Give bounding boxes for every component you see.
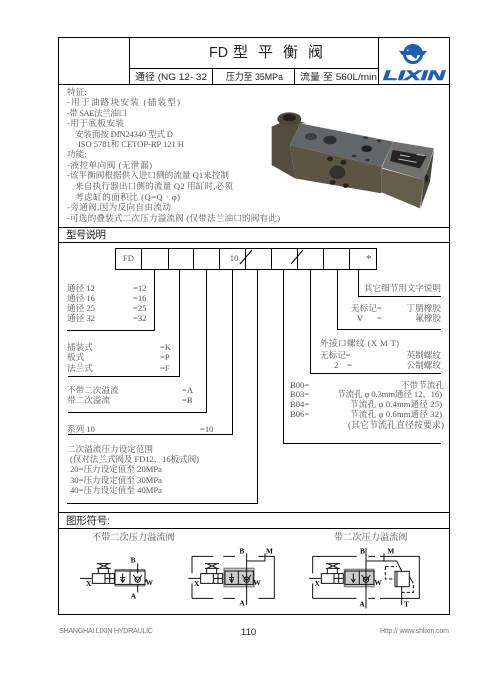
footer: page number: 110	[241, 627, 256, 638]
secondary pressure range	[67, 443, 199, 495]
heading: model code: 型号说明	[66, 228, 106, 241]
port thread options: 2	[334, 360, 338, 370]
port thread options: 公制螺纹	[407, 359, 441, 370]
symbol: valve with manifold, port M: B	[239, 546, 244, 555]
features text block: 特征:	[67, 86, 87, 97]
orifice options: B03=	[290, 389, 309, 399]
symbol: valve with secondary relief, ports M and T: W	[374, 578, 382, 587]
seal options: =	[377, 313, 382, 323]
mounting options: 插装式	[67, 341, 93, 352]
features text block: 安装面按 DIN24340 型式 D	[75, 128, 173, 139]
mounting options: =K	[160, 342, 172, 352]
bore size options: =12	[133, 283, 146, 293]
symbol: valve with secondary relief, ports M and T	[309, 546, 419, 608]
bore size options: 通径 16	[67, 292, 96, 303]
features text block: 功能:	[67, 148, 87, 159]
bore size options: 通径 25	[67, 302, 95, 313]
footer: url: Http:// www.shlixin.com	[380, 628, 449, 635]
secondary pressure range: 40=压力设定值至 40MPa	[70, 484, 162, 495]
secondary pressure range: 二次溢流压力设定范围	[67, 443, 153, 454]
secondary pressure range: 30=压力设定值至 30MPa	[70, 474, 162, 485]
icon: LIXIN logo: LIXIN	[383, 68, 445, 83]
symbol: valve with manifold, port M	[188, 546, 274, 608]
secondary relief options: 不带二次溢流	[67, 384, 119, 395]
bore size options: 通径 12	[67, 282, 95, 293]
spec: flow: 流量 至 560L/min	[300, 71, 377, 83]
seal options: V	[357, 313, 364, 323]
title	[209, 44, 323, 61]
features text block: ISO 5781和 CETOP-RP 121 H	[78, 139, 184, 149]
bore size options: 通径 32	[67, 312, 95, 323]
mounting options	[67, 341, 172, 373]
symbol: valve without relief: X	[86, 579, 92, 588]
footer: company: SHANGHAI LIXIN HYDRAULIC	[59, 626, 153, 635]
spec: bore size: 通径 (NG 12- 32	[135, 71, 207, 83]
symbol: valve without relief: A	[131, 591, 137, 600]
mounting options: 法兰式	[67, 362, 93, 373]
secondary relief options: =A	[182, 385, 194, 395]
bore size options: =16	[133, 293, 147, 303]
orifice options: 节流孔 φ 0.4mm通径 25)	[350, 398, 442, 409]
symbol: valve with manifold, port M: X	[194, 579, 200, 588]
orifice options: B04=	[290, 399, 309, 409]
leader lines	[67, 270, 441, 504]
features text block: -该平衡阀根据供入进口侧的流量 Q1来控制	[67, 169, 229, 180]
symbol: valve with secondary relief, ports M and T: T	[404, 599, 409, 608]
symbol: valve with secondary relief, ports M and T: A	[359, 599, 365, 608]
heading: symbols: 图形符号:	[66, 514, 110, 527]
symbol: valve with secondary relief, ports M and T: B	[360, 546, 365, 555]
port thread options: 外接口螺纹 (X M T)	[320, 337, 399, 348]
features text block: 来自执行器出口侧的流量 Q2 用缸时,必须	[75, 180, 233, 191]
product photo: valve block	[272, 112, 434, 208]
seal options: 无标记=	[351, 302, 382, 313]
symbol: valve with manifold, port M: A	[239, 599, 245, 608]
title: 衡	[283, 44, 298, 61]
orifice options: B00=	[290, 380, 309, 390]
model code boxes: FD	[123, 253, 134, 263]
icon: LIXIN logo	[383, 45, 445, 83]
mounting options: =P	[160, 352, 170, 362]
secondary relief options: 带二次溢流	[67, 394, 110, 405]
features text block	[67, 86, 280, 223]
spec: pressure: 压力至 35MPa	[226, 71, 284, 83]
secondary relief options	[67, 384, 194, 405]
model code boxes: 10	[230, 253, 238, 263]
bore size options: =25	[133, 303, 146, 313]
seal options: 丁腈橡胶	[407, 302, 441, 313]
orifice options: 节流孔 φ 0.3mm通径 12、16)	[337, 388, 442, 399]
features text block: -可选的叠装式二次压力溢流阀 (仅带法兰油口的阀有此)	[67, 212, 280, 223]
page frame	[58, 38, 450, 614]
caption: with relief: 带二次压力溢流阀	[334, 531, 408, 542]
orifice options: 节流孔 φ 0.6mm通径 32)	[350, 408, 442, 419]
title: 型	[233, 44, 248, 61]
symbol: valve without relief: W	[146, 578, 154, 587]
model code boxes: *	[366, 253, 372, 265]
features text block: -用于底板安装	[67, 117, 124, 128]
series: =10	[200, 424, 213, 434]
secondary pressure range: 20=压力设定值至 20MPa	[70, 463, 162, 474]
features text block: -用于油路块安装 (插装型)	[67, 96, 180, 107]
port thread options: =	[347, 360, 352, 370]
mounting options: 板式	[67, 351, 85, 362]
title: 平	[258, 44, 273, 61]
port thread options: 无标记=	[320, 349, 351, 360]
symbol: valve with manifold, port M: M	[266, 546, 273, 555]
title: 阀	[308, 44, 323, 61]
other details note: 其它细节用文字说明	[364, 282, 441, 293]
symbol: valve without relief	[80, 555, 154, 600]
mounting options: =F	[160, 363, 170, 373]
features text block: 考虑缸的面积比 (Q=Q · φ)	[75, 191, 180, 202]
caption: without relief: 不带二次压力溢流阀	[92, 531, 175, 542]
seal options	[351, 302, 441, 323]
features text block: -带 SAE法兰油口	[67, 107, 127, 118]
orifice options: B06=	[290, 409, 309, 419]
seal options: 氟橡胶	[415, 312, 441, 323]
series: 系列 10	[67, 423, 95, 434]
secondary pressure range: (仅对法兰式阀及 FD12、16板式阀)	[70, 453, 199, 464]
orifice options	[290, 379, 444, 430]
symbol: valve with secondary relief, ports M and T: X	[315, 579, 321, 588]
orifice options: (其它节流孔直径按要求)	[348, 419, 444, 430]
features text block: -液控单向阀 (无泄漏)	[67, 159, 152, 170]
features text block: -旁通阀,因为反向自由流动	[67, 201, 171, 212]
symbol: valve with secondary relief, ports M and T: M	[387, 546, 394, 555]
orifice options: 不带节流孔	[401, 379, 444, 390]
symbol: valve without relief: B	[131, 555, 136, 564]
bore size options	[67, 282, 147, 323]
bore size options: =32	[133, 313, 146, 323]
series	[67, 423, 213, 434]
model code boxes	[116, 248, 376, 270]
port thread options	[320, 337, 441, 370]
symbol: valve with manifold, port M: W	[253, 578, 261, 587]
title: FD	[209, 44, 228, 61]
secondary relief options: =B	[182, 395, 193, 405]
port thread options: 英制螺纹	[407, 349, 441, 360]
